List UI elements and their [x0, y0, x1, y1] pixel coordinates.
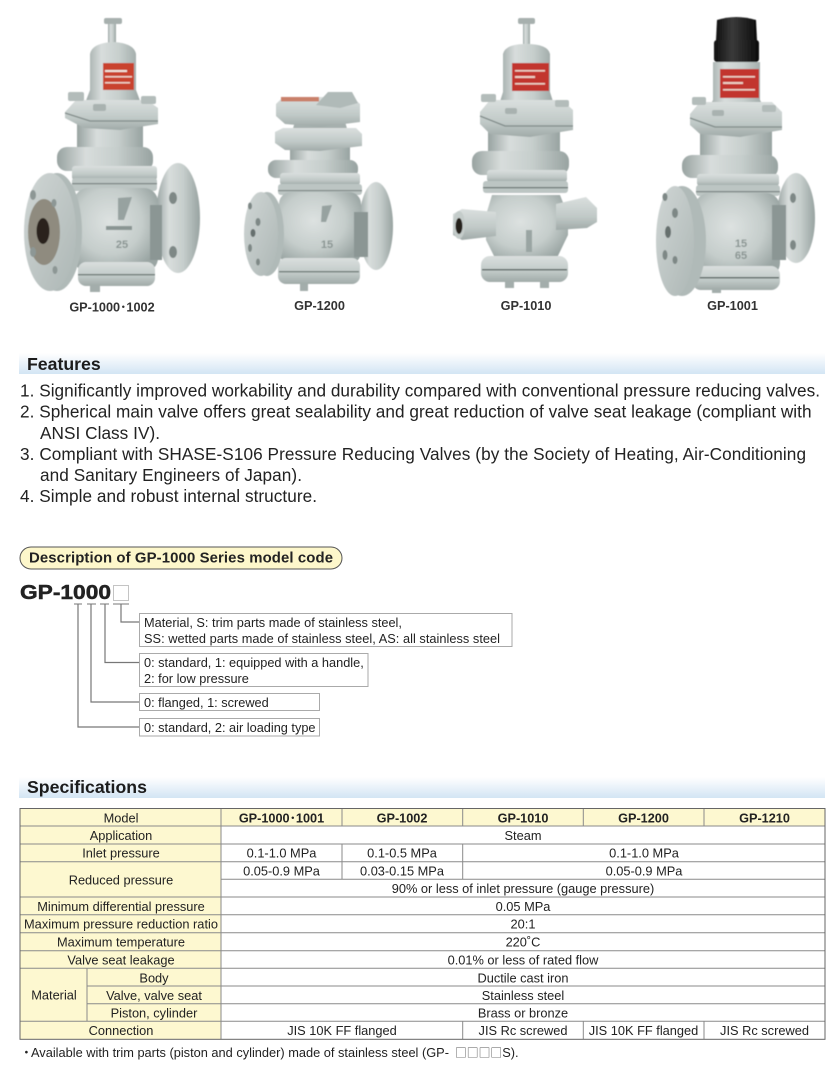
table header row: Model [104, 810, 138, 825]
pill heading: model code description [20, 547, 342, 569]
option box: connection: 0: flanged, 1: screwed [144, 695, 269, 710]
features list: 1. Significantly improved workability and durability compared with conventional pressure reducing valves. [20, 381, 820, 401]
table values: 20:1 [511, 917, 535, 932]
section heading: Specifications: Specifications [27, 777, 147, 797]
table values: 0.1-0.5 MPa [367, 846, 438, 861]
table row labels: Valve, valve seat [106, 988, 202, 1003]
table values: 0.01% or less of rated flow [448, 952, 599, 967]
product photo: GP-1200 valve: 15 [321, 239, 333, 251]
table values: JIS 10K FF flanged [287, 1023, 397, 1038]
table header row: GP-1000･1001 [239, 811, 324, 825]
option box: connection [140, 694, 320, 710]
features list: 3. Compliant with SHASE-S106 Pressure Reducing Valves (by the Society of Heating, Air-Conditioning [20, 444, 806, 464]
product photo: GP-1010 valve [453, 18, 597, 288]
table values: 90% or less of inlet pressure (gauge pressure) [392, 881, 654, 896]
table values: Steam [504, 828, 542, 843]
model code: GP-1000 with blank suffix box: GP-1000 [20, 581, 111, 604]
option box: material: SS: wetted parts made of stainless steel, AS: all stainless steel [144, 631, 500, 646]
table header row [104, 810, 790, 825]
caption: GP-1200: GP-1200 [294, 299, 345, 313]
table row labels: Reduced pressure [69, 872, 173, 887]
table values: Ductile cast iron [477, 970, 569, 985]
table values: 0.1-1.0 MPa [609, 846, 680, 861]
features list: and Sanitary Engineers of Japan). [40, 465, 302, 485]
table row labels: Maximum pressure reduction ratio [24, 917, 218, 932]
table values: 0.05 MPa [496, 899, 551, 914]
product photo: GP-1000·1002 valve [24, 18, 200, 292]
table row labels: Piston, cylinder [111, 1005, 198, 1020]
product photo: GP-1001 valve with black handle [656, 17, 815, 296]
section heading: Features: Features [27, 354, 101, 374]
table row labels: Minimum differential pressure [37, 899, 205, 914]
table header row: GP-1210 [739, 811, 790, 825]
option box: material [140, 614, 512, 646]
features list [20, 381, 820, 506]
features list: 2. Spherical main valve offers great sealability and great reduction of valve seat leakage (compliant with [20, 402, 812, 422]
table header row: GP-1002 [377, 811, 427, 825]
section heading: Features [19, 353, 825, 374]
table values: 0.05-0.9 MPa [606, 863, 683, 878]
table header row: GP-1010 [498, 811, 548, 825]
pill heading: model code description: Description of GP-1000 Series model code [29, 551, 333, 567]
table row labels: Application [90, 828, 152, 843]
model code diagram [20, 581, 512, 736]
table row labels: Connection [89, 1023, 153, 1038]
table row labels: Body [139, 970, 169, 985]
table values: 0.05-0.9 MPa [243, 863, 321, 878]
table row labels [24, 828, 218, 1038]
table row labels: Maximum temperature [57, 935, 185, 950]
table values: 220˚C [506, 935, 540, 950]
specifications table [20, 808, 825, 1039]
table values: Stainless steel [482, 988, 564, 1003]
footnote: Available with trim parts (piston and cylinder) made of stainless steel (GP- [31, 1045, 449, 1060]
features list: ANSI Class IV). [40, 423, 160, 443]
table values: JIS Rc screwed [479, 1023, 567, 1038]
option box: handle [140, 654, 368, 686]
table values: JIS 10K FF flanged [589, 1023, 698, 1038]
footnote: ・ [20, 1045, 33, 1060]
option box: material: Material, S: trim parts made of stainless steel, [144, 615, 402, 630]
features list: 4. Simple and robust internal structure. [20, 486, 317, 506]
caption: GP-1010: GP-1010 [501, 299, 551, 313]
table header row: GP-1200 [618, 811, 669, 825]
table values: JIS Rc screwed [720, 1023, 809, 1038]
section heading: Specifications [19, 777, 825, 798]
product photo: GP-1000·1002 valve: 25 [116, 239, 128, 251]
table values [243, 828, 809, 1038]
product photo: GP-1001 valve with black handle: 15 [735, 238, 747, 250]
table values: 0.03-0.15 MPa [360, 863, 445, 878]
product photo: GP-1200 valve [244, 92, 393, 291]
connector lines [74, 604, 139, 727]
table values: Brass or bronze [478, 1005, 568, 1020]
table row labels: Valve seat leakage [67, 952, 175, 967]
table row labels: Inlet pressure [82, 846, 160, 861]
option box: handle: 0: standard, 1: equipped with a handle, [144, 655, 364, 670]
caption: GP-1001: GP-1001 [707, 299, 758, 313]
option box: loading type: 0: standard, 2: air loading type [144, 720, 316, 735]
table row labels: Material [31, 988, 77, 1002]
table values: 0.1-1.0 MPa [247, 846, 317, 861]
footnote: S). [502, 1045, 519, 1060]
footnote: □□□□ [455, 1044, 502, 1061]
product photo: GP-1001 valve with black handle: 65 [735, 250, 747, 262]
option box: handle: 2: for low pressure [144, 671, 249, 686]
caption: GP-1000·1002: GP-1000･1002 [69, 300, 155, 314]
